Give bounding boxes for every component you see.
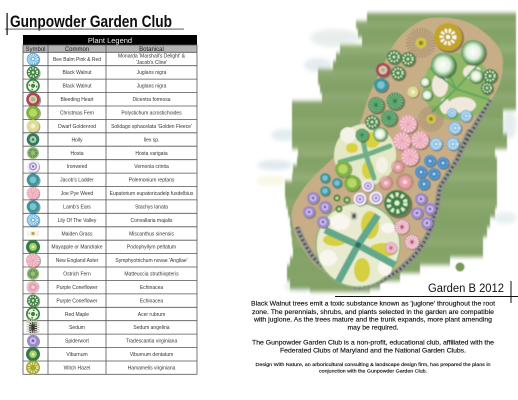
legend grid bbox=[23, 45, 197, 374]
legend common names: Sedum bbox=[69, 325, 85, 331]
legend botanical names: Stachys lanata bbox=[135, 204, 168, 210]
legend common names: Witch Hazel bbox=[64, 365, 90, 371]
legend botanical names: Juglans nigra bbox=[137, 84, 167, 90]
tree bed: middle walnut bbox=[334, 124, 396, 186]
legend common names: Maiden Grass bbox=[61, 231, 93, 237]
legend botanical names: Dicentra formosa bbox=[132, 97, 171, 103]
legend botanical names: Juglans nigra bbox=[137, 70, 167, 76]
garden plan illustration bbox=[256, 13, 517, 292]
text block: black walnut note: may be required. bbox=[348, 324, 399, 332]
legend common names: Lily Of The Valley bbox=[58, 218, 97, 224]
legend botanical names: Acer rubrum bbox=[138, 312, 165, 318]
text block: club description: Federated Clubs of Maryland and the National Garden Clubs. bbox=[280, 348, 466, 354]
legend common names: Ironweed bbox=[67, 164, 87, 170]
legend column headers: Symbol bbox=[25, 47, 46, 53]
legend botanical names: Vernonia crinita bbox=[134, 164, 169, 170]
lawn brush strokes bbox=[285, 13, 516, 292]
legend common names: Red Maple bbox=[65, 312, 89, 318]
small shrub on lawn bbox=[456, 262, 464, 272]
text block: design credit: Design With Nature, an arboricultural consulting & landscape design firm, has prepared the plans in bbox=[256, 362, 491, 368]
legend common names: Ostrich Fern bbox=[63, 272, 91, 278]
legend common names: Black Walnut bbox=[62, 84, 92, 90]
legend botanical names: 'Jacob's Cline' bbox=[136, 60, 167, 66]
legend botanical names: Symphyotrichum novae 'Angliae' bbox=[115, 258, 188, 264]
legend botanical names: Viburnum dentatum bbox=[130, 352, 173, 358]
legend botanical names: Tradescantia virginiana bbox=[126, 339, 177, 345]
panel: plant legend table bbox=[23, 35, 197, 375]
legend common names: Spiderwort bbox=[65, 339, 90, 345]
planting: shrubs and perennials bbox=[303, 23, 498, 255]
legend common names: Bleeding Heart bbox=[60, 97, 94, 103]
garden bed bbox=[292, 17, 503, 286]
legend botanical names: Convallaria majalis bbox=[131, 218, 173, 224]
legend botanical names: Hamamelis virginiana bbox=[128, 365, 176, 371]
legend common names: Mayapple or Mandrake bbox=[51, 245, 103, 251]
legend common names: Purple Coneflower bbox=[56, 298, 98, 304]
legend common names: Christmas Fern bbox=[60, 110, 94, 116]
legend symbols bbox=[26, 53, 41, 375]
text block: club description: The Gunpowder Garden Club is a non-profit, educational club, affiliated with the bbox=[252, 340, 494, 346]
legend common names: Purple Coneflower bbox=[56, 285, 98, 291]
text block: design credit bbox=[256, 362, 491, 374]
legend botanical names: Echinacea bbox=[140, 285, 163, 291]
legend common names: Lamb's Ears bbox=[63, 204, 91, 210]
text block: black walnut note: zone. The perennials, shrubs, and plants selected in the garden are compatible bbox=[252, 309, 494, 316]
legend common names: Black Walnut bbox=[62, 70, 92, 76]
text block: black walnut note: with juglone. As the trees mature and the trunk expands, more plant amending bbox=[253, 316, 492, 324]
title: Gunpowder Garden Club bbox=[10, 12, 172, 31]
legend common names: Dwarf Goldenrod bbox=[58, 124, 96, 130]
legend column headers: Botanical bbox=[139, 47, 164, 53]
legend column headers: Common bbox=[65, 47, 89, 53]
legend common names: Viburnum bbox=[66, 352, 88, 358]
legend common names: Jacob's Ladder bbox=[60, 178, 94, 184]
legend botanical names: Miscanthus sinensis bbox=[129, 231, 174, 237]
legend common names: New England Aster bbox=[56, 258, 99, 264]
rock border bbox=[297, 100, 490, 287]
legend common names: Holly bbox=[71, 137, 83, 143]
legend common names: Hosta bbox=[70, 151, 84, 157]
legend botanical names bbox=[110, 54, 194, 371]
legend botanical names: Matteuccia struthiopteris bbox=[124, 272, 179, 278]
text block: black walnut note bbox=[251, 300, 495, 332]
garden label: Garden B 2012 bbox=[428, 283, 504, 295]
legend botanical names: Podophyllym peltatum bbox=[127, 245, 176, 251]
legend botanical names: Hosta varigata bbox=[135, 151, 168, 157]
text block: club description bbox=[252, 340, 494, 354]
legend common names bbox=[51, 57, 103, 371]
legend botanical names: Sedum angelina bbox=[133, 325, 170, 331]
legend botanical names: Ilex sp. bbox=[144, 137, 159, 143]
legend heading bbox=[23, 35, 197, 45]
legend heading: Plant Legend bbox=[88, 36, 132, 45]
text block: design credit: conjunction with the Gunpowder Garden Club. bbox=[319, 368, 427, 374]
legend botanical names: Monarda 'Marshall's Delight' & bbox=[118, 54, 186, 60]
legend common names: Joe Pye Weed bbox=[61, 191, 93, 197]
text block: black walnut note: Black Walnut trees emit a toxic substance known as 'juglone' throughout the root bbox=[251, 300, 495, 308]
legend botanical names: Solidago sphacelata 'Golden Fleece' bbox=[111, 124, 192, 130]
legend common names: Bee Balm Pink & Red bbox=[53, 57, 101, 63]
legend botanical names: Polystichum acrostichoides bbox=[121, 110, 182, 116]
legend botanical names: Echinacea bbox=[140, 298, 163, 304]
legend botanical names: Eupatorium eupatoricadelp fusdelbius bbox=[110, 191, 194, 197]
tree bed: bottom walnut bbox=[316, 203, 400, 287]
legend botanical names: Polemonium reptans bbox=[129, 178, 175, 184]
legend column headers bbox=[23, 45, 197, 53]
tree bed: top walnut bbox=[423, 53, 491, 121]
watercolor wash bbox=[256, 29, 517, 292]
